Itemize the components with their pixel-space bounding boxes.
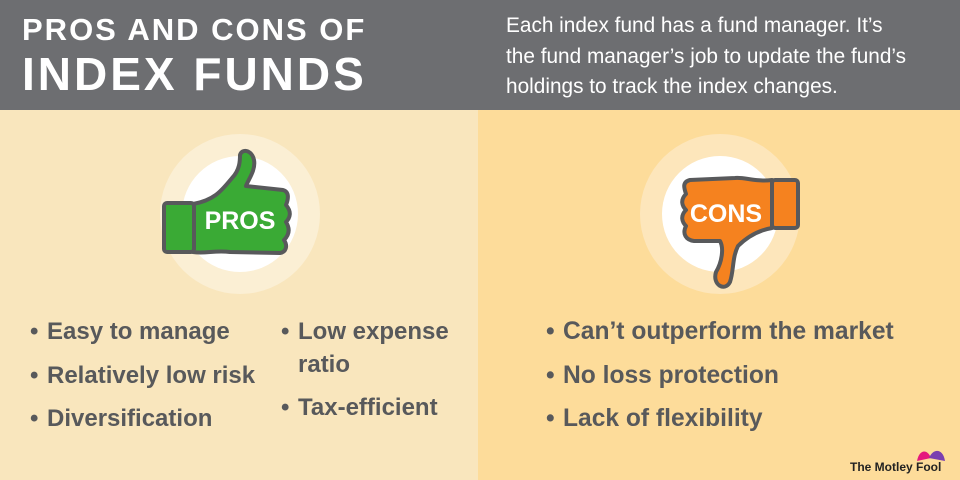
icon: thumbs down CONS	[640, 134, 800, 294]
pros list col 1: Relatively low risk	[47, 362, 255, 389]
logo: The Motley Fool: The Motley Fool	[850, 460, 941, 474]
pros list col 2: ratio	[298, 351, 350, 378]
pros list col 2: •	[281, 394, 289, 421]
icon: thumbs up PROS: PROS	[205, 207, 275, 235]
cons list: Lack of flexibility	[563, 405, 763, 432]
pros list col 1: •	[30, 362, 38, 389]
intro text: holdings to track the index changes.	[506, 75, 838, 98]
cons list: •	[546, 405, 555, 432]
logo: The Motley Fool	[850, 450, 945, 474]
cons list: No loss protection	[563, 362, 779, 389]
title: PROS AND CONS OF	[22, 12, 366, 47]
title	[22, 12, 367, 100]
icon: thumbs down CONS: CONS	[690, 200, 762, 228]
header bar	[0, 0, 960, 110]
pros list col 2	[281, 318, 449, 421]
pros list col 1	[30, 318, 255, 432]
panel: left pros background	[0, 110, 478, 480]
pros list col 2: •	[281, 318, 289, 345]
intro text: Each index fund has a fund manager. It’s	[506, 14, 883, 37]
pros list col 2: Tax-efficient	[298, 394, 438, 421]
pros list col 1: Diversification	[47, 405, 212, 432]
panel: right cons background	[478, 110, 960, 480]
pros list col 1: Easy to manage	[47, 318, 230, 345]
title: INDEX FUNDS	[22, 48, 367, 100]
intro text	[506, 14, 906, 98]
pros list col 2: Low expense	[298, 318, 449, 345]
cons list: •	[546, 318, 555, 345]
icon: thumbs up PROS	[160, 134, 320, 294]
pros list col 1: •	[30, 318, 38, 345]
pros list col 1: •	[30, 405, 38, 432]
cons list: •	[546, 362, 555, 389]
cons list	[546, 318, 894, 432]
cons list: Can’t outperform the market	[563, 318, 894, 345]
intro text: the fund manager’s job to update the fund’s	[506, 44, 906, 68]
